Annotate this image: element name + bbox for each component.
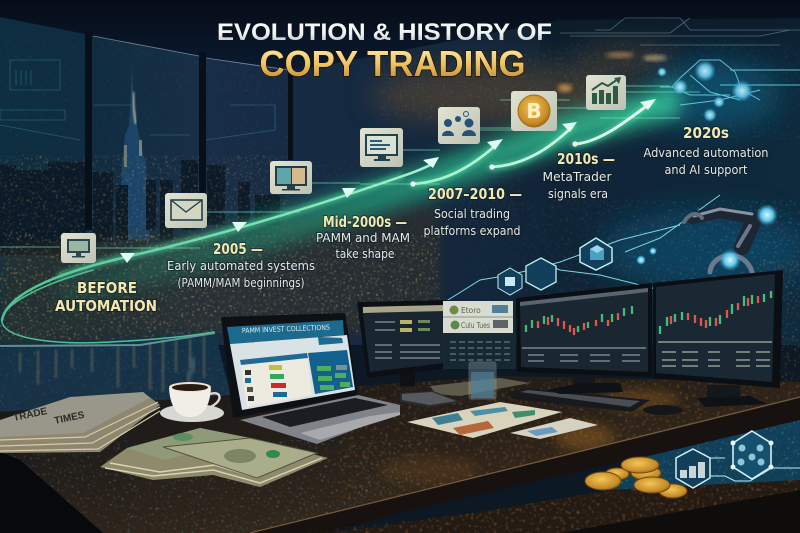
robot arm — [684, 204, 778, 272]
title line 2: COPY TRADING — [260, 43, 526, 84]
window frames — [85, 30, 293, 230]
shoreline — [0, 333, 215, 346]
milestone: before automation: AUTOMATION — [55, 297, 157, 315]
milestone: 2007-2010: platforms expand — [424, 224, 520, 238]
darkening at the upper right — [540, 0, 800, 70]
laptop — [221, 313, 400, 444]
report papers on desk — [407, 402, 598, 439]
small keyboard — [400, 391, 462, 407]
gold coins — [585, 457, 687, 498]
milestone: 2020s — [644, 124, 768, 177]
lower shelf — [330, 480, 800, 533]
decorative light streaks from milestone icons — [0, 86, 700, 248]
lower loop of the curve — [2, 270, 214, 343]
icon: social people card — [438, 107, 480, 144]
milestone: 2005: (PAMM/MAM beginnings) — [178, 276, 304, 290]
desk — [0, 376, 800, 533]
milestone: mid-2000s: PAMM and MAM — [316, 231, 410, 245]
city lights on buildings — [0, 155, 290, 240]
milestone: 2005: Early automated systems — [167, 259, 315, 273]
milestone: 2010s — [542, 150, 615, 201]
milestone: mid-2000s: take shape — [336, 247, 394, 261]
milestone: 2007-2010: Social trading — [434, 207, 510, 221]
main strand — [2, 163, 434, 320]
timeline curve with milestone arrows — [2, 99, 656, 343]
warm glow on the city floor — [0, 200, 440, 348]
milestone: 2010s: 2010s — — [557, 150, 615, 168]
circuit network, upper right — [560, 18, 800, 122]
water with reflections — [0, 333, 232, 412]
tower landmark — [120, 65, 150, 240]
laptop header bar — [227, 320, 344, 344]
blue haze right side — [650, 61, 780, 129]
icon: 2005 envelope card — [165, 193, 207, 228]
milestone: before automation — [55, 279, 157, 315]
icon: growth chart card — [586, 75, 626, 110]
icon: mid-2000s monitor card — [270, 161, 312, 194]
milestone: 2010s: signals era — [548, 187, 608, 201]
right monitor candlestick chart — [660, 291, 771, 334]
laptop screen bezel — [221, 313, 358, 418]
title line 1: EVOLUTION & HISTORY OF — [217, 19, 552, 46]
milestone: 2020s: Advanced automation — [644, 146, 768, 160]
desk front face — [250, 398, 800, 533]
left dark corner — [0, 452, 103, 533]
milestone: mid-2000s — [316, 213, 410, 261]
icon: bitcoin coin card: B — [526, 99, 542, 123]
milestone: 2007-2010 — [424, 185, 522, 238]
icon: bitcoin coin card — [511, 91, 557, 131]
platform panel: eToro and other brands: Etoro — [461, 306, 481, 315]
mouse — [643, 405, 683, 415]
icon: hexagon network on desk — [730, 431, 774, 479]
warm haze behind the middle of the timeline — [370, 65, 630, 125]
milestone: 2007-2010: 2007–2010 — — [428, 185, 522, 203]
small left monitor — [357, 300, 450, 386]
milestone: 2020s: and AI support — [664, 163, 748, 177]
city lights on the ground — [0, 235, 440, 340]
milestone: 2005: 2005 — — [213, 240, 263, 258]
HUD lines in left windows — [0, 60, 275, 140]
laptop page — [230, 335, 355, 410]
glowing teal band along the timeline — [60, 85, 680, 310]
laptop screen heading: PAMM INVEST COLLECTIONS — [242, 324, 330, 335]
icon: hexagon bar chart on desk — [676, 449, 800, 488]
stacked newspapers: TIMES — [53, 410, 86, 427]
holographic panel under desk — [610, 420, 800, 490]
background: night city through office windows — [0, 0, 800, 412]
title — [217, 19, 552, 84]
milestone: mid-2000s: Mid-2000s — — [323, 213, 407, 231]
stack of dollar bills — [100, 428, 328, 487]
center keyboard — [507, 388, 650, 412]
center trading monitor — [516, 283, 652, 394]
laptop base — [240, 395, 400, 444]
skyline buildings — [0, 160, 280, 255]
stacked newspapers — [0, 392, 160, 453]
icon: 2007-2010 monitor card — [360, 128, 403, 167]
milestone: 2020s: 2020s — [683, 124, 729, 142]
center monitor candlestick chart — [526, 306, 632, 332]
milestone: 2010s: MetaTrader — [542, 170, 612, 184]
ceiling beam — [0, 0, 800, 70]
milestone: before automation: BEFORE — [77, 279, 137, 297]
circuit network, mid right with hexagon icons — [446, 194, 800, 300]
milestone: 2005 — [167, 240, 315, 290]
notebook behind papers — [430, 378, 530, 396]
right trading monitor — [653, 270, 783, 407]
center monitor data table — [522, 348, 646, 361]
glass of water — [469, 362, 496, 399]
coffee cup with steam — [160, 358, 224, 422]
platform panel: eToro and other brands: Culu Tues — [461, 321, 490, 330]
stacked newspapers: TRADE — [12, 406, 49, 424]
icon: before automation monitor card — [61, 233, 96, 263]
right monitor data table — [658, 342, 772, 366]
platform panel: eToro and other brands — [443, 301, 516, 369]
